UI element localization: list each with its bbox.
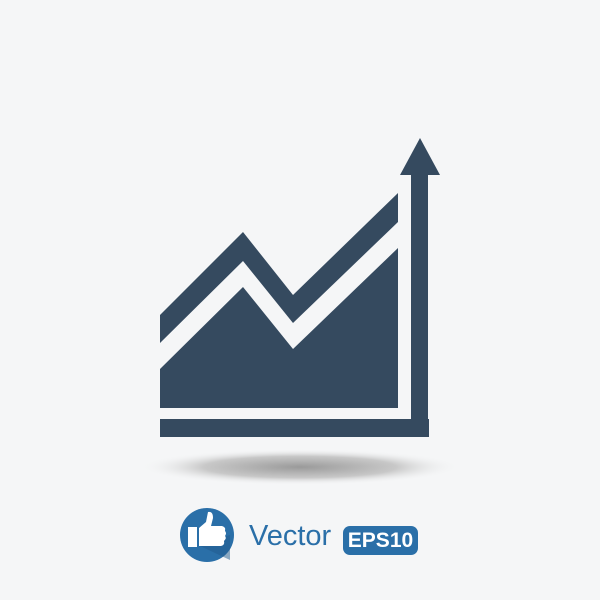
- badge: EPS10: [343, 526, 418, 555]
- shadow under chart: [140, 449, 460, 485]
- baseline bar: [160, 419, 429, 437]
- filled area: [160, 248, 398, 408]
- badge: EPS10: EPS10: [348, 529, 413, 552]
- top zigzag band: [160, 193, 398, 343]
- icon: growth chart: [160, 138, 440, 437]
- logo: thumbs up circle: [180, 508, 234, 562]
- text: Vector: Vector: [249, 520, 331, 552]
- arrow: [400, 138, 440, 437]
